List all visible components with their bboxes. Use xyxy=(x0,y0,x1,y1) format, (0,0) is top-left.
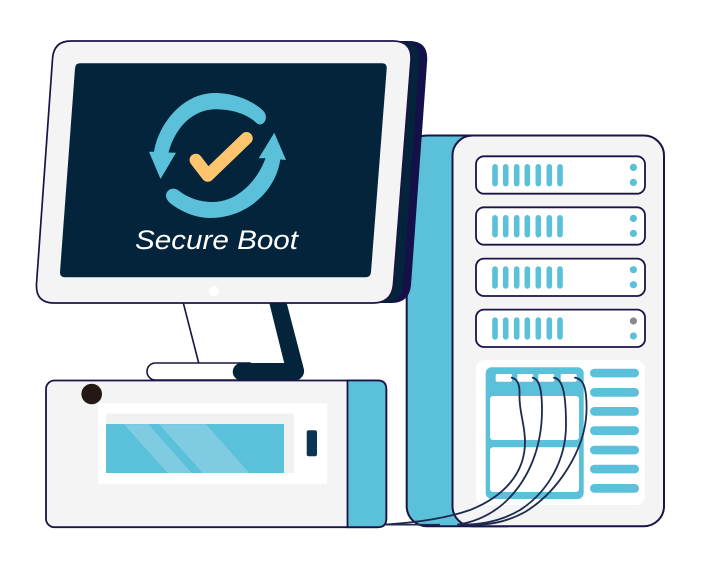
desktop unit xyxy=(46,380,440,527)
monitor screen xyxy=(60,63,387,277)
monitor rear shell xyxy=(380,41,427,303)
desktop blue side panel xyxy=(348,380,386,527)
desktop case xyxy=(46,380,386,527)
icon: secure boot refresh arrows with check xyxy=(149,93,286,218)
top refresh arrow xyxy=(149,93,266,179)
rack unit 1 xyxy=(476,156,645,194)
bottom refresh arrow xyxy=(166,133,286,218)
check mark xyxy=(196,138,246,176)
drive bay xyxy=(98,403,327,484)
rack unit 3 xyxy=(476,259,645,296)
stand dark leg and foot xyxy=(233,303,304,380)
server tower xyxy=(407,136,664,526)
screen label: Secure Boot xyxy=(135,225,300,255)
stand thin back line xyxy=(183,303,199,363)
rack unit 4 xyxy=(476,310,645,347)
lower patch panel xyxy=(476,360,645,505)
power light xyxy=(209,286,219,296)
network cables xyxy=(386,378,587,525)
server back panel xyxy=(407,136,527,526)
monitor xyxy=(36,41,427,303)
rack unit 2 xyxy=(476,207,645,245)
monitor bezel xyxy=(36,41,411,303)
stand base outline xyxy=(147,363,250,380)
server front panel xyxy=(452,136,664,526)
monitor stand xyxy=(147,303,304,380)
connecting cable to server xyxy=(386,524,440,526)
drive slot indicator xyxy=(307,430,317,456)
black button xyxy=(81,384,102,404)
